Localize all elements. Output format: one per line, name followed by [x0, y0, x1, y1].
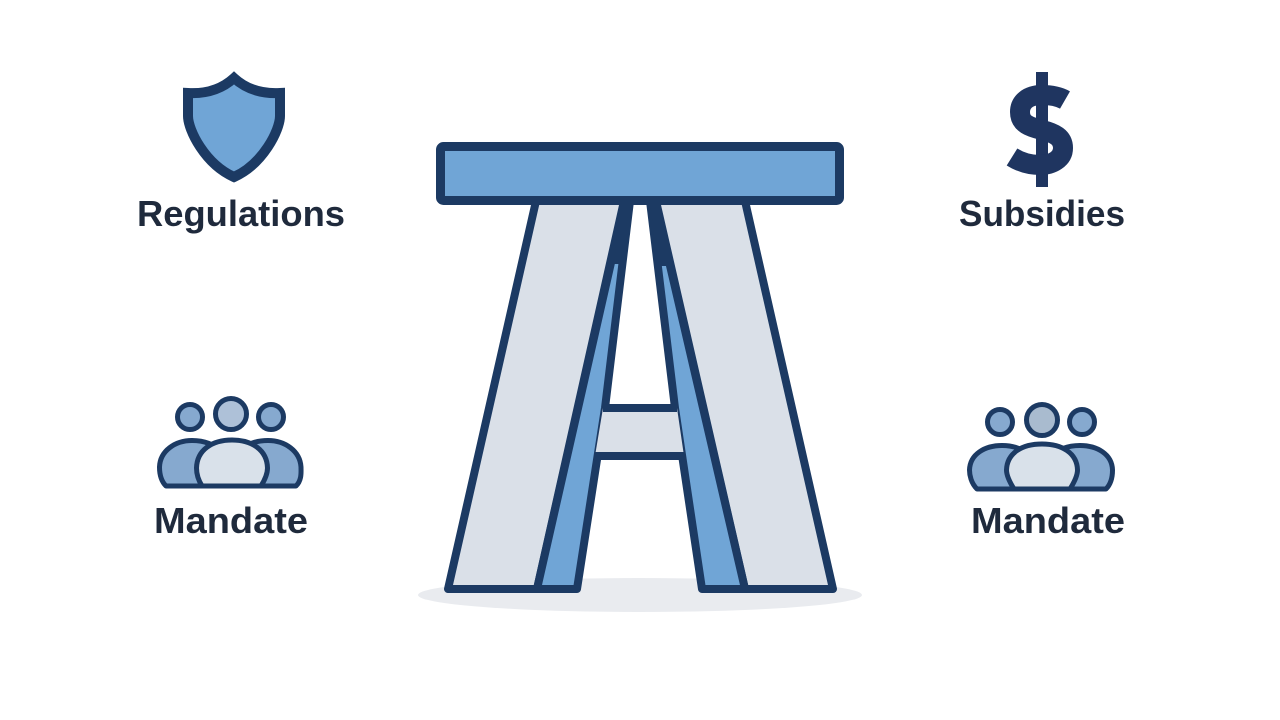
- item: regulations: [137, 78, 345, 234]
- icon: people group: [160, 398, 301, 486]
- item: mandate right: [970, 404, 1125, 541]
- icon: dollar sign: [1012, 72, 1065, 187]
- stool cross brace: [595, 408, 684, 456]
- stool seat: [440, 146, 840, 200]
- label: regulations: Regulations: [137, 193, 345, 234]
- label: subsidies: Subsidies: [959, 193, 1125, 234]
- label: mandate left: Mandate: [154, 500, 308, 541]
- stool left leg: [448, 201, 630, 589]
- stool illustration: [418, 146, 862, 612]
- icon: people group: [970, 404, 1112, 489]
- label: mandate right: Mandate: [971, 500, 1125, 541]
- item: subsidies: [959, 72, 1125, 234]
- ground shadow: [418, 578, 862, 612]
- icon: shield: [188, 78, 280, 177]
- stool right leg: [650, 201, 833, 589]
- item: mandate left: [154, 398, 308, 541]
